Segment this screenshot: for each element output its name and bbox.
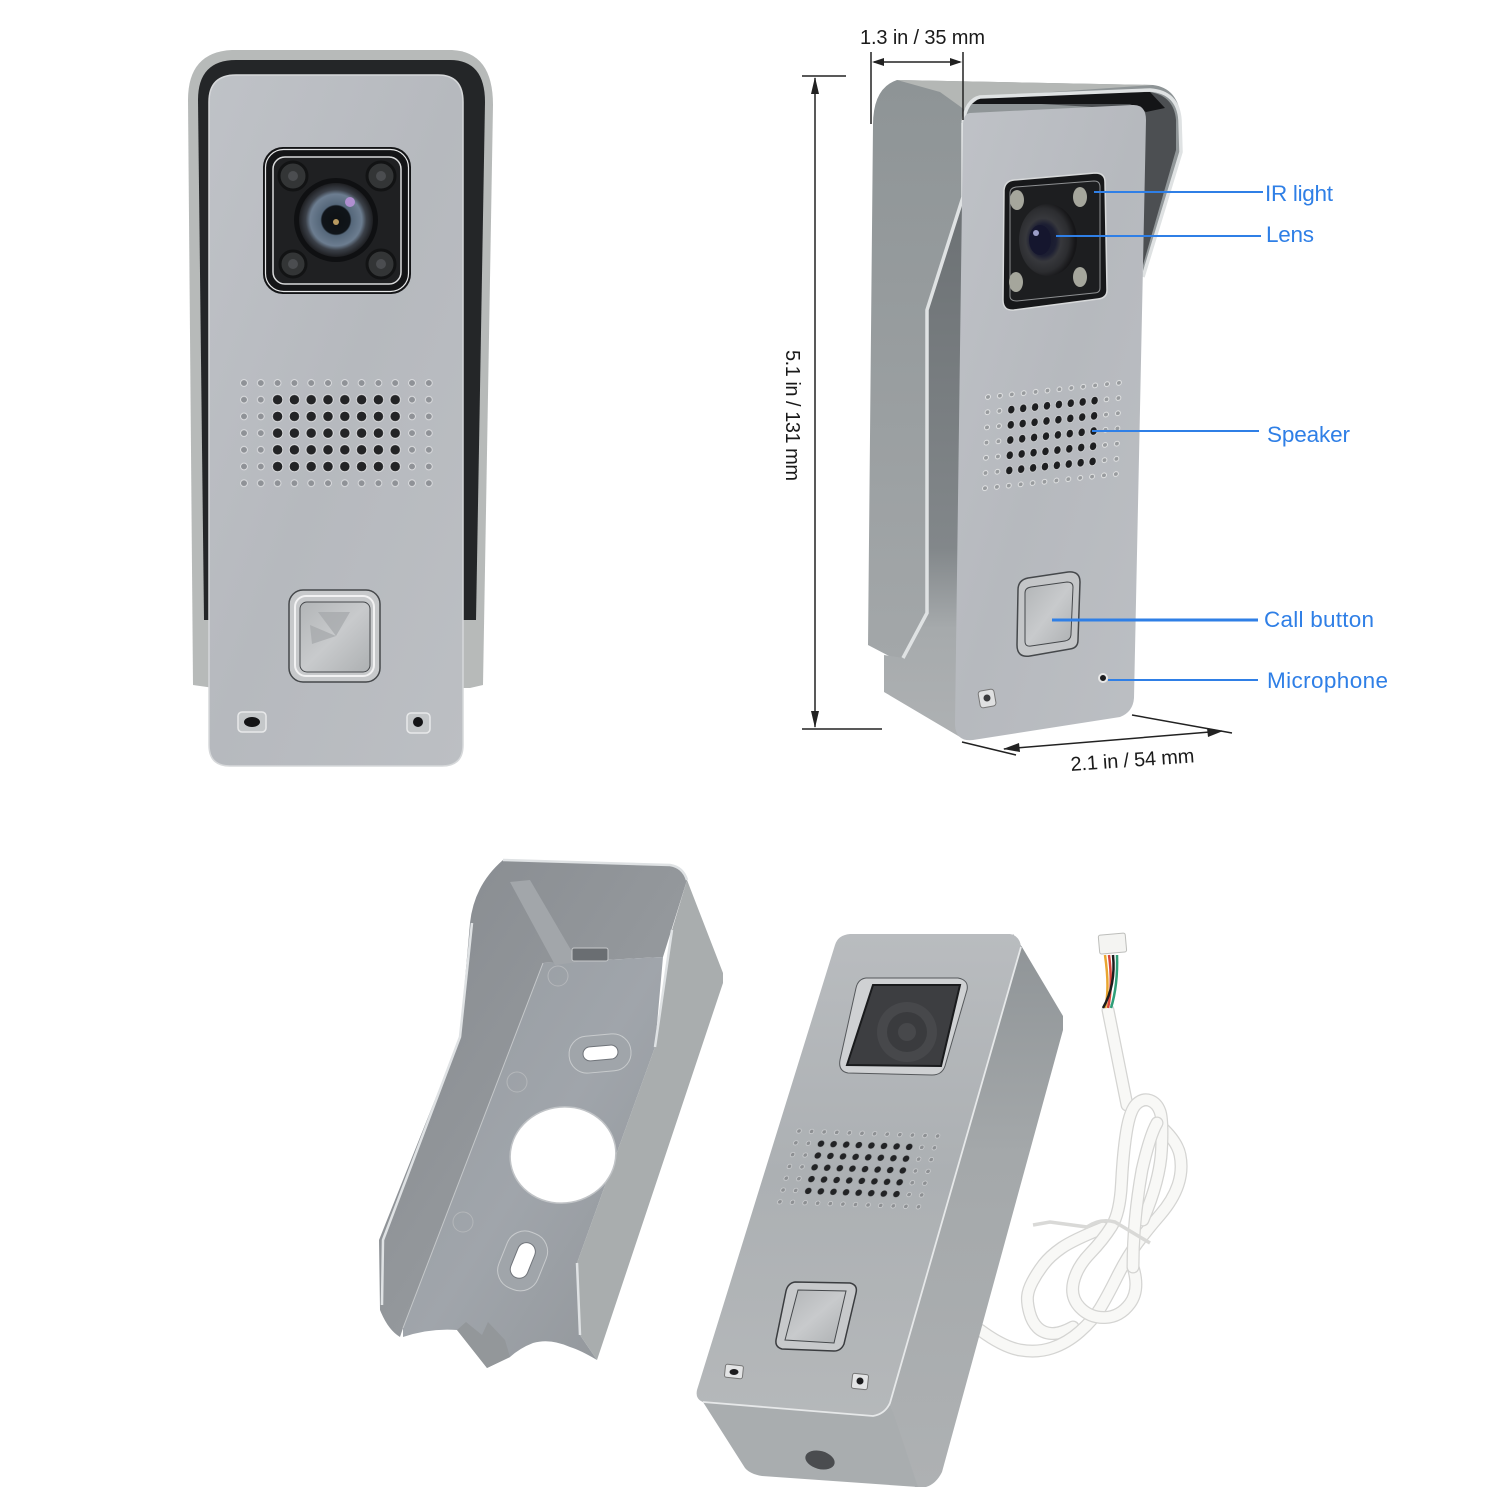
front plate (209, 75, 463, 766)
lower mounting slot (492, 1225, 553, 1297)
hood silhouette left wall (379, 860, 687, 1337)
call button (289, 590, 380, 682)
speaker grille (979, 375, 1125, 496)
speaker grille (236, 375, 437, 492)
body lower (884, 197, 963, 737)
module side (890, 934, 1063, 1487)
dimension: depth (860, 27, 985, 124)
lens (294, 178, 378, 262)
callout: IR light: IR light (1265, 181, 1334, 206)
dimension: width: 2.1 in / 54 mm (1070, 745, 1195, 776)
hood edge highlights (382, 860, 687, 1335)
IR LEDs (279, 162, 395, 278)
hood bottom clip (457, 1322, 510, 1368)
angled view doorbell (868, 80, 1182, 740)
call button (1017, 572, 1080, 656)
hood latch (572, 948, 608, 961)
camera module (263, 147, 411, 294)
hood floor crease (403, 963, 543, 1328)
hood right wall (577, 880, 723, 1360)
callout: Call button: Call button (1264, 607, 1374, 632)
IR LEDs (1009, 187, 1087, 292)
hood interior (975, 92, 1176, 265)
rain hood back view (379, 860, 723, 1368)
lens (1019, 204, 1077, 276)
cable tie (1033, 1221, 1150, 1243)
mounting holes (238, 712, 430, 733)
hood bright edge (903, 90, 1181, 658)
mounting holes (724, 1364, 869, 1390)
connector (1098, 933, 1127, 954)
module front (697, 934, 1021, 1416)
hood floor (403, 957, 663, 1368)
front hood (188, 50, 493, 688)
back side camera window (840, 978, 967, 1075)
front view doorbell (188, 50, 493, 766)
camera module (1003, 173, 1107, 310)
dimension: width (962, 715, 1232, 776)
side plate (955, 105, 1146, 740)
hood ridge (510, 880, 578, 965)
hood embossed circles (453, 966, 568, 1232)
upper mounting slot (568, 1032, 633, 1075)
callout: Microphone: Microphone (1267, 668, 1388, 693)
hood side (868, 80, 1182, 658)
dimension: height (781, 76, 882, 729)
bottom port (803, 1447, 837, 1473)
callout: Lens: Lens (1266, 222, 1314, 247)
button fan sheen (310, 612, 350, 644)
hood top surface (897, 80, 1153, 110)
callout: Speaker: Speaker (1267, 422, 1350, 447)
wires (1103, 955, 1117, 1008)
module bottom (703, 1402, 918, 1487)
dimension: height: 5.1 in / 131 mm (781, 350, 803, 481)
dimension: depth: 1.3 in / 35 mm (860, 27, 985, 49)
module edge highlights (703, 947, 1021, 1416)
mounting holes (978, 674, 1107, 708)
hood center cable hole (502, 1099, 624, 1211)
speaker grille (772, 1125, 945, 1213)
module with cable (697, 933, 1181, 1487)
call button (776, 1282, 856, 1351)
cable (980, 1010, 1181, 1351)
